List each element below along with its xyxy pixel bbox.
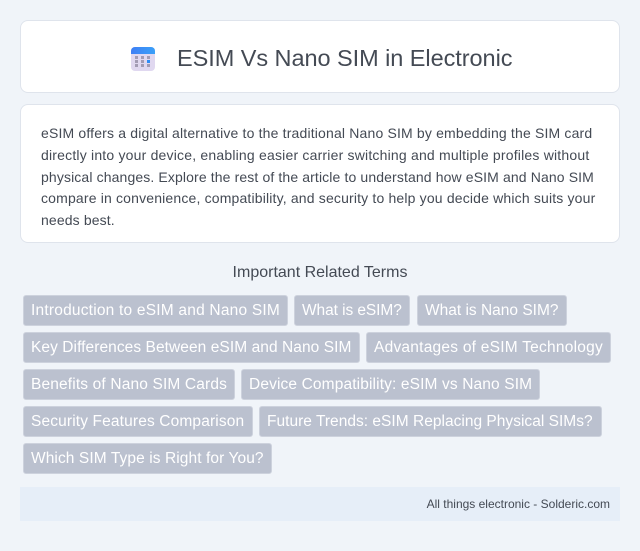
intro paragraph: directly into your device, enabling easier carrier switching and multiple profiles without [41, 147, 589, 163]
icon: calendar grid [131, 47, 155, 71]
header panel [20, 20, 620, 93]
tag: What is eSIM? [302, 302, 402, 319]
intro paragraph [41, 125, 596, 228]
intro text panel [20, 104, 620, 243]
tag [417, 295, 567, 326]
tag: What is Nano SIM? [425, 302, 559, 319]
title: ESIM Vs Nano SIM in Electronic [177, 45, 512, 71]
tag [23, 332, 360, 363]
tag [23, 406, 253, 437]
tag [241, 369, 540, 400]
tag: Which SIM Type is Right for You? [31, 450, 264, 467]
tag: Future Trends: eSIM Replacing Physical SIMs? [267, 413, 593, 430]
tag: Security Features Comparison [31, 413, 244, 430]
intro paragraph: needs best. [41, 212, 115, 228]
intro paragraph: physical changes. Explore the rest of the article to understand how eSIM and Nano SIM [41, 169, 594, 185]
tag [294, 295, 410, 326]
tag: Key Differences Between eSIM and Nano SIM [31, 339, 352, 356]
tag: Introduction to eSIM and Nano SIM [31, 302, 280, 319]
intro paragraph: compare in convenience, compatibility, and security to help you decide which suits your [41, 190, 595, 206]
tag [23, 295, 288, 326]
tag: Advantages of eSIM Technology [374, 339, 603, 356]
tag [366, 332, 611, 363]
tag: Device Compatibility: eSIM vs Nano SIM [249, 376, 532, 393]
tag [23, 369, 235, 400]
footer credit: All things electronic - Solderic.com [427, 497, 610, 511]
related term tags [23, 295, 611, 474]
section heading: Important Related Terms [233, 264, 407, 281]
tag [23, 443, 272, 474]
tag [259, 406, 602, 437]
intro paragraph: eSIM offers a digital alternative to the traditional Nano SIM by embedding the SIM card [41, 125, 592, 141]
tag: Benefits of Nano SIM Cards [31, 376, 227, 393]
footer bar [20, 487, 620, 521]
